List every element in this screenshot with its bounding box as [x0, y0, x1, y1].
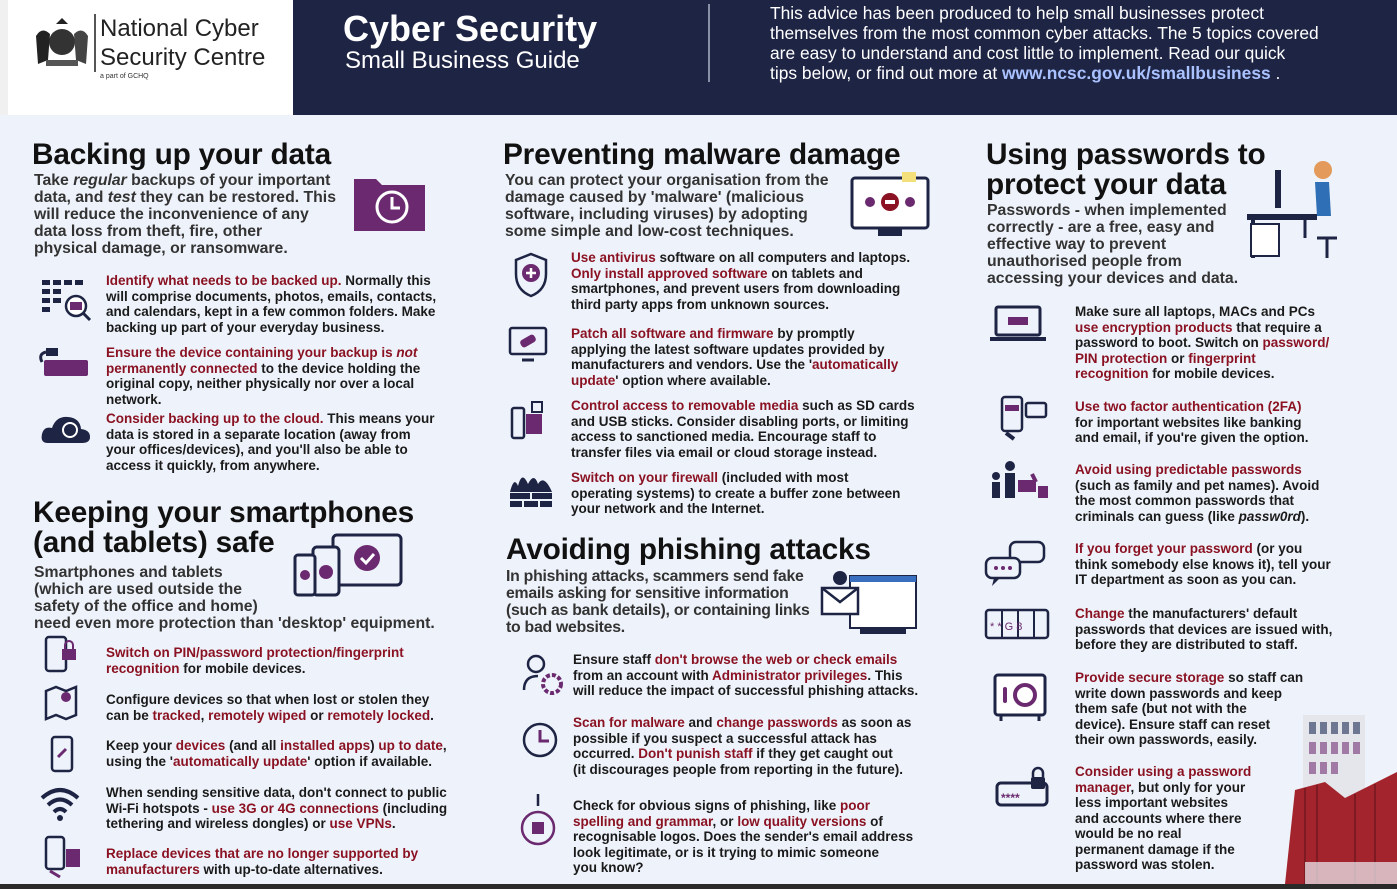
- item 3 text: data is stored in a separate location (away from: [106, 426, 411, 442]
- item text: recognition for mobile devices.: [106, 660, 306, 676]
- intro: data loss from theft, fire, other: [34, 223, 262, 240]
- heading: Preventing malware damage: [503, 138, 900, 171]
- intro: to bad websites.: [506, 619, 625, 636]
- intro: [34, 564, 435, 632]
- panel: phishing: from an account with Administrator privileges. This: [573, 668, 903, 682]
- panel: malware: Only install approved software on tablets and: [571, 266, 863, 280]
- panel: passwords: and accounts where there: [1075, 810, 1242, 826]
- panel: passwords: password was stolen.: [1075, 857, 1215, 872]
- icon: speech bubbles: [984, 540, 1048, 588]
- panel: smartphones: When sending sensitive data, don't connect to public: [106, 785, 447, 800]
- item text: Switch on PIN/password protection/fingerprint: [106, 645, 404, 660]
- panel: malware: Use antivirus software on all computers and laptops.: [571, 250, 910, 265]
- panel: malware: manufacturers and vendors. Use the 'automatically: [571, 357, 898, 372]
- item 1 text: will comprise documents, photos, emails, contacts,: [106, 288, 436, 304]
- panel: smartphones: Wi-Fi hotspots - use 3G or 4G connections (including: [106, 800, 447, 816]
- heading: Using passwords to: [986, 138, 1266, 171]
- header intro text: This advice has been produced to help small businesses protect: [770, 3, 1264, 23]
- icon: phone update: [50, 736, 74, 772]
- icon: phone bin: [44, 836, 80, 878]
- panel: smartphones: can be tracked, remotely wiped or remotely locked.: [106, 708, 434, 722]
- intro: emails asking for sensitive information: [506, 585, 789, 602]
- heading: protect your data: [986, 168, 1226, 201]
- logo text: Security Centre: [100, 44, 265, 71]
- panel: passwords: passwords that devices are issued with,: [1075, 622, 1332, 636]
- panel: passwords: manager, but only for your: [1075, 780, 1245, 794]
- panel: malware: access to sanctioned media. Encourage staff to: [571, 429, 876, 444]
- panel: passwords: for important websites like banking: [1075, 414, 1302, 430]
- icon: password lock: ****: [1001, 791, 1020, 805]
- intro: You can protect your organisation from the: [505, 172, 829, 189]
- intro: [34, 172, 336, 257]
- item 3 text: your offices/devices), and you'll also be able to: [106, 442, 408, 457]
- panel: phishing: Check for obvious signs of phishing, like poor: [573, 798, 870, 813]
- header: title panel: [293, 0, 1397, 115]
- icon: files search: [42, 280, 91, 321]
- panel: phishing: occurred. Don't punish staff if they get caught out: [573, 746, 893, 761]
- panel: phishing: (it discourages people from reporting in the future).: [573, 762, 903, 776]
- icon: monitor patch: [508, 326, 548, 362]
- item 3 text: [106, 411, 435, 473]
- intro: Passwords - when implemented: [987, 202, 1227, 219]
- item 1 text: and calendars, kept in a few common folders. Make: [106, 304, 435, 319]
- heading: Avoiding phishing attacks: [506, 533, 871, 566]
- panel: malware: Control access to removable media such as SD cards: [571, 398, 915, 413]
- panel: malware: and USB sticks. Consider disabling ports, or limiting: [571, 414, 909, 428]
- panel: passwords: Provide secure storage so staff can: [1075, 670, 1303, 685]
- icon: 2fa: [1000, 395, 1052, 441]
- item 2 text: [106, 345, 420, 406]
- item text: [106, 645, 404, 676]
- icon: cloud: [42, 416, 90, 443]
- icon: hook: [520, 794, 556, 846]
- illustration: buildings: [1285, 715, 1397, 884]
- panel: phishing: [506, 533, 918, 875]
- header intro text: themselves from the most common cyber attacks. The 5 topics covered: [770, 23, 1319, 43]
- header: logo panel: [0, 0, 293, 115]
- intro: Take regular backups of your important: [34, 172, 330, 189]
- heading: (and tablets) safe: [33, 526, 274, 559]
- intro: need even more protection than 'desktop' equipment.: [34, 615, 435, 632]
- icon: admin user: [522, 654, 563, 695]
- intro: In phishing attacks, scammers send fake: [506, 568, 804, 585]
- icon: usb drive: [39, 348, 88, 376]
- intro: (such as bank details), or containing links: [506, 602, 810, 619]
- panel: phishing: Ensure staff don't browse the web or check emails: [573, 652, 897, 667]
- item 1 text: backing up part of your everyday business.: [106, 320, 384, 334]
- icon: safe: [993, 673, 1049, 723]
- panel: passwords: Use two factor authentication (2FA): [1075, 399, 1302, 414]
- intro: some simple and low-cost techniques.: [505, 223, 794, 240]
- icon: map: [44, 685, 78, 721]
- item 2 text: original copy, neither physically nor over a local: [106, 376, 414, 391]
- icon: scan clock: [522, 722, 558, 758]
- panel: phishing: spelling and grammar, or low quality versions of: [573, 814, 883, 828]
- icon: wifi: [40, 788, 80, 821]
- icon: shield: [514, 252, 548, 298]
- intro: unauthorised people from: [987, 253, 1182, 270]
- panel: malware: smartphones, and prevent users from downloading: [571, 281, 900, 296]
- intro: effective way to prevent: [987, 236, 1166, 253]
- icon: usb media: [510, 401, 543, 440]
- panel: phishing: look legitimate, or is it trying to mimic someone: [573, 844, 879, 860]
- intro: [506, 568, 810, 636]
- panel: malware: your network and the Internet.: [571, 501, 765, 516]
- intro: safety of the office and home): [34, 598, 258, 615]
- header intro text: [770, 3, 1319, 83]
- item 1 text: [106, 273, 436, 335]
- panel: passwords: PIN protection or fingerprint: [1075, 350, 1256, 366]
- panel: passwords: Change the manufacturers' default: [1075, 606, 1297, 621]
- panel: passwords: their own passwords, easily.: [1075, 732, 1257, 747]
- panel: passwords: If you forget your password (or you: [1075, 541, 1302, 556]
- panel: phishing: you know?: [573, 860, 644, 875]
- panel: passwords: write down passwords and keep: [1075, 686, 1282, 700]
- icon: phishing email: [820, 571, 917, 634]
- header intro text: tips below, or find out more at www.ncsc.gov.uk/smallbusiness .: [770, 63, 1280, 83]
- intro: accessing your devices and data.: [987, 270, 1238, 287]
- panel: malware: third party apps from unknown sources.: [571, 296, 829, 312]
- panel: passwords: permanent damage if the: [1075, 842, 1235, 856]
- panel: passwords: think somebody else knows it), tell your: [1075, 556, 1331, 572]
- intro: software, including viruses) by adopting: [505, 206, 808, 223]
- panel: malware: transfer files via email or cloud storage instead.: [571, 444, 877, 460]
- panel: passwords: Consider using a password: [1075, 764, 1251, 779]
- panel: smartphones: Keep your devices (and all installed apps) up to date,: [106, 738, 447, 753]
- header: logo panel: a part of GCHQ: [100, 73, 149, 80]
- heading: [33, 496, 414, 559]
- panel: passwords: less important websites: [1075, 795, 1228, 810]
- heading: [986, 138, 1266, 201]
- panel: backing up: [32, 138, 436, 473]
- panel: malware: update' option where available.: [571, 372, 771, 388]
- icon: person at desk: [1247, 161, 1337, 258]
- panel: smartphones: tethering and wireless dongles) or use VPNs.: [106, 816, 396, 831]
- icon: crest: [36, 18, 88, 66]
- panel: phishing: recognisable logos. Does the sender's email address: [573, 829, 913, 844]
- panel: passwords: (such as family and pet names). Avoid: [1075, 478, 1319, 492]
- icon: firewall: [510, 478, 552, 507]
- panel: smartphones: manufacturers with up-to-date alternatives.: [106, 862, 383, 876]
- intro: [505, 172, 829, 240]
- icon: monitor malware: [850, 172, 930, 236]
- item 1 text: Identify what needs to be backed up. Normally this: [106, 273, 431, 288]
- item 2 text: Ensure the device containing your backup is not: [106, 345, 417, 360]
- panel: smartphones: [33, 496, 447, 878]
- panel: passwords: Make sure all laptops, MACs and PCs: [1075, 304, 1315, 319]
- panel: phishing: Scan for malware and change passwords as soon as: [573, 715, 911, 730]
- panel: malware: [503, 138, 930, 516]
- heading: Backing up your data: [32, 138, 331, 171]
- logo text: National Cyber: [100, 15, 259, 42]
- intro: [987, 202, 1238, 287]
- intro: Smartphones and tablets: [34, 564, 223, 581]
- panel: passwords: [984, 138, 1337, 872]
- intro: damage caused by 'malware' (malicious: [505, 189, 804, 206]
- panel: passwords: them safe (but not with the: [1075, 701, 1247, 716]
- panel: passwords: use encryption products that require a: [1075, 320, 1322, 334]
- title: Cyber Security: [343, 8, 597, 49]
- item 3 text: access it quickly, from anywhere.: [106, 458, 320, 472]
- panel: smartphones: Replace devices that are no longer supported by: [106, 846, 418, 861]
- intro: correctly - are a free, easy and: [987, 219, 1214, 236]
- intro: (which are used outside the: [34, 581, 242, 598]
- intro: will reduce the inconvenience of any: [34, 206, 309, 223]
- panel: passwords: and email, if you're given the option.: [1075, 430, 1308, 445]
- item 3 text: Consider backing up to the cloud. This means your: [106, 411, 435, 426]
- panel: passwords: Avoid using predictable passwords: [1075, 462, 1302, 477]
- icon: devices: [294, 534, 402, 596]
- panel: passwords: would be no real: [1075, 826, 1182, 841]
- item 2 text: network.: [106, 392, 162, 406]
- panel: passwords: recognition for mobile devices.: [1075, 366, 1275, 381]
- panel: phishing: will reduce the impact of successful phishing attacks.: [573, 683, 918, 698]
- icon: laptop: [990, 306, 1046, 341]
- icon: family pet: [988, 460, 1050, 500]
- header: title panel: Small Business Guide: [345, 47, 580, 74]
- icon: keypad: * * G 8: [990, 621, 1022, 633]
- intro: data, and test they can be restored. This: [34, 189, 336, 206]
- heading: Keeping your smartphones: [33, 496, 414, 529]
- icon: phone lock: [44, 636, 76, 672]
- panel: smartphones: using the 'automatically update' option if available.: [106, 754, 432, 768]
- intro: physical damage, or ransomware.: [34, 240, 288, 257]
- panel: smartphones: Configure devices so that when lost or stolen they: [106, 692, 429, 707]
- icon: password lock: [995, 765, 1051, 811]
- panel: passwords: criminals can guess (like passw0rd).: [1075, 508, 1309, 524]
- icon: keypad: [984, 608, 1050, 640]
- panel: passwords: IT department as soon as you can.: [1075, 572, 1296, 587]
- panel: phishing: possible if you suspect a successful attack has: [573, 730, 877, 746]
- logo text: [94, 14, 265, 72]
- panel: malware: Switch on your firewall (included with most: [571, 470, 849, 485]
- panel: passwords: device). Ensure staff can reset: [1075, 716, 1270, 732]
- panel: passwords: password to boot. Switch on password/: [1075, 335, 1329, 350]
- header intro text: are easy to understand and cost little to implement. Read our quick: [770, 43, 1285, 63]
- bottom strip: [0, 884, 1397, 889]
- icon: folder clock: [354, 179, 425, 231]
- panel: malware: operating systems) to create a buffer zone between: [571, 486, 900, 500]
- panel: malware: Patch all software and firmware by promptly: [571, 326, 855, 341]
- item 2 text: permanently connected to the device holding the: [106, 360, 420, 376]
- panel: passwords: before they are distributed to staff.: [1075, 637, 1298, 652]
- panel: malware: applying the latest software updates provided by: [571, 342, 885, 356]
- panel: passwords: the most common passwords that: [1075, 493, 1294, 508]
